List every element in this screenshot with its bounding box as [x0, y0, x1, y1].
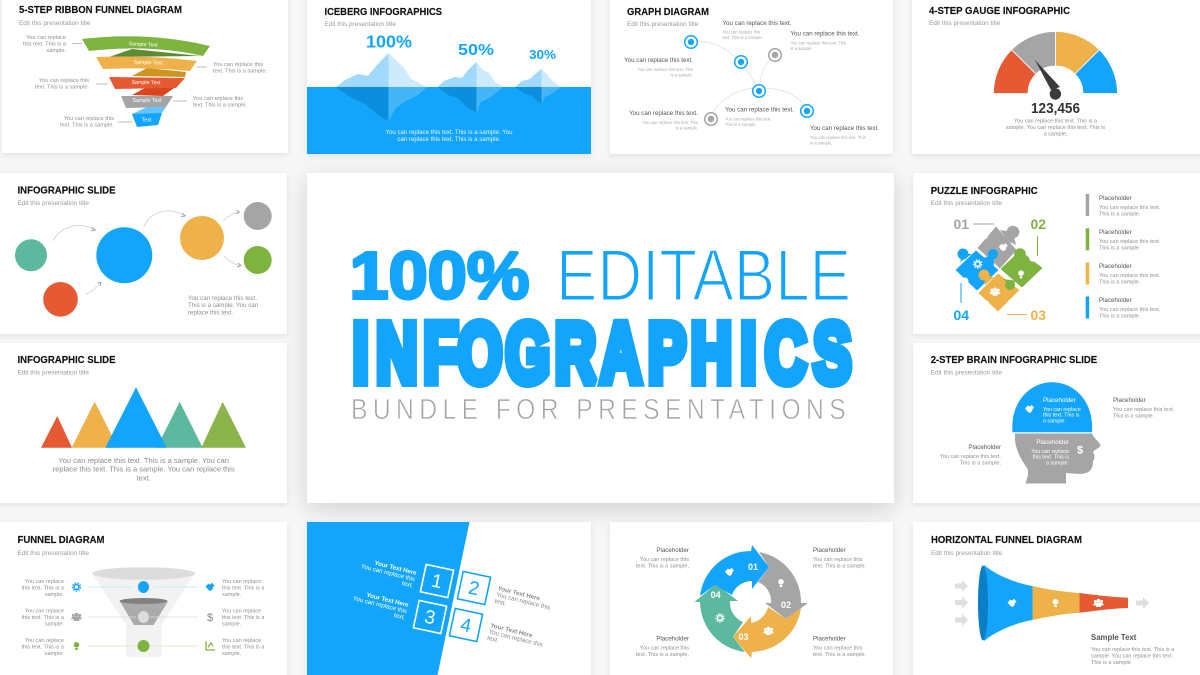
graph links	[691, 42, 807, 119]
subtitle: funnel: Edit this presentation title	[18, 550, 89, 557]
puzzle legend: Placeholder	[1099, 195, 1132, 202]
puzzle pieces	[955, 226, 1043, 312]
subtitle: gauge: Edit this presentation title	[929, 20, 1001, 27]
puzzle legend: Placeholder	[1099, 229, 1132, 236]
numbered squares: 3	[422, 607, 437, 629]
cycle icons	[716, 568, 784, 635]
cycle texts: Placeholder	[656, 636, 689, 642]
panel: infographic slide circles	[0, 173, 287, 334]
callout texts: ribbon funnel: You can replace this	[64, 116, 114, 122]
funnel texts: sample.	[45, 622, 64, 628]
tilted texts: Your Text Here	[497, 585, 541, 603]
water	[307, 87, 591, 154]
panel: funnel diagram	[0, 522, 287, 675]
panel: 2-step brain infographic	[913, 343, 1200, 503]
iceberg 30%: 30%	[529, 47, 556, 62]
numbered squares: 1	[429, 571, 444, 593]
callout texts: ribbon funnel: text. This is a sample.	[193, 102, 247, 108]
graph labels: You can replace this text.	[790, 30, 860, 38]
subtitle: horizontal funnel: Edit this presentation title	[931, 550, 1003, 557]
brain texts: You can replace	[1043, 407, 1081, 413]
subtitle: iceberg: Edit this presentation title	[324, 21, 396, 28]
funnel graphic	[88, 567, 198, 657]
funnel texts: this text. This is a	[22, 615, 65, 621]
puzzle legend: This is a sample.	[1099, 211, 1141, 217]
heading: horizontal funnel: HORIZONTAL FUNNEL DIAGRAM	[931, 534, 1082, 546]
cycle texts: text. This is a sample.	[813, 652, 867, 658]
heading: gauge: 4-STEP GAUGE INFOGRAPHIC	[929, 5, 1070, 17]
blue slanted block	[307, 522, 470, 675]
numbered squares: 4	[458, 615, 474, 637]
panel: horizontal funnel diagram	[913, 522, 1200, 675]
sample text block	[1091, 633, 1175, 666]
funnel texts	[22, 579, 265, 657]
ribbon funnel graphic	[82, 36, 210, 127]
tilted texts: text.	[401, 580, 414, 590]
cycle texts: You can replace this	[813, 557, 862, 563]
head: grey face	[1015, 434, 1101, 484]
funnel texts: You can replace	[222, 609, 261, 615]
graph labels: is a sample.	[790, 46, 813, 51]
tilted texts: Your Text Here	[366, 592, 410, 609]
cycle texts: Placeholder	[813, 547, 846, 554]
cycle texts: You can replace this	[640, 557, 689, 563]
triangles caption: text.	[137, 473, 151, 482]
puzzle icons	[974, 243, 1024, 296]
subtitle: puzzle: Edit this presentation title	[931, 200, 1003, 207]
head: blue brain	[1012, 382, 1092, 432]
gauge chart	[993, 31, 1118, 93]
funnel texts: You can replace	[222, 579, 261, 585]
funnel texts: this text. This is a	[22, 644, 65, 650]
triangles chart	[41, 387, 246, 448]
puzzle numbers: 04	[954, 307, 969, 323]
heading: circles slide: INFOGRAPHIC SLIDE	[18, 184, 116, 196]
graph labels: is a sample.	[676, 126, 698, 130]
headline: EDITABLE: EDITABLE	[556, 236, 851, 316]
iceberg 100%: 100%	[366, 32, 412, 52]
headline: INFOGRAPHICS: INFOGRAPHICS	[353, 307, 851, 401]
callout texts: ribbon funnel: sample.	[46, 48, 66, 54]
cycle numbers: 03	[738, 632, 749, 642]
graph labels: You can replace this text. This	[790, 40, 846, 46]
iceberg caption: can replace this text. This is a sample.	[397, 136, 501, 143]
brain texts: a sample.	[1043, 418, 1066, 424]
puzzle numbers	[954, 216, 1046, 323]
panel: tilted numbered squares	[307, 522, 591, 675]
funnel texts: sample.	[222, 592, 242, 598]
funnel texts: You can replace	[25, 579, 64, 585]
funnel texts: this text. This is a	[222, 615, 265, 621]
funnel texts: this text. This is a	[22, 586, 65, 592]
gauge caption: a sample.	[1044, 132, 1068, 138]
sample text block: Sample Text	[1091, 633, 1137, 642]
funnel texts: sample.	[222, 622, 242, 628]
callout texts: ribbon funnel: this text. This is a	[23, 42, 67, 48]
funnel icons	[71, 583, 215, 650]
arrows in and out	[955, 580, 1149, 626]
graph labels: is a sample.	[810, 140, 832, 146]
cycle numbers	[711, 562, 791, 642]
tilted texts: text.	[494, 598, 507, 607]
iceberg 100%	[336, 32, 427, 121]
panel: 5-step ribbon funnel diagram	[2, 0, 288, 153]
graph labels: You can replace this text.	[810, 125, 879, 132]
graph labels: You can replace this text. This	[637, 67, 693, 72]
heading: graph: GRAPH DIAGRAM	[627, 6, 709, 18]
triangles caption: replace this text. This is a sample. You can replace this	[53, 465, 235, 474]
puzzle legend: This is a sample.	[1099, 313, 1141, 319]
subtitle: triangles slide: Edit this presentation title	[18, 370, 89, 376]
tilted texts: Your Text Here	[490, 622, 534, 640]
funnel texts: You can replace	[25, 609, 64, 615]
gauge caption: sample. You can replace this text. This is	[1006, 125, 1105, 131]
puzzle numbers: 03	[1030, 307, 1046, 323]
cycle texts: Placeholder	[813, 636, 846, 642]
cycle numbers: 01	[748, 562, 758, 572]
gauge caption: You can replace this text. This is a	[1014, 118, 1097, 124]
brain texts: You can replace this text.	[1113, 407, 1174, 413]
brain texts: This is a sample.	[1113, 413, 1155, 419]
brain texts: You can replace this text.	[940, 454, 1001, 460]
funnel texts: sample.	[45, 651, 64, 657]
callout texts: ribbon funnel: text. This is a sample.	[213, 68, 267, 74]
brain texts: This is a sample.	[960, 460, 1001, 466]
sample text block: sample. You can replace this text.	[1091, 654, 1173, 660]
cycle texts	[636, 547, 867, 658]
callout texts: ribbon funnel: You can replace this	[213, 62, 263, 68]
tilted texts: Your Text Here	[374, 560, 418, 577]
graph labels: This is a sample.	[725, 122, 756, 127]
panel: iceberg infographics	[307, 0, 591, 154]
panel: 4-step gauge infographic	[912, 0, 1200, 154]
circles caption: This is a sample. You can	[188, 302, 259, 309]
graph labels: You can replace this text.	[722, 20, 792, 27]
ribbon funnel graphic: Sample Text	[132, 98, 162, 104]
brain texts	[940, 397, 1175, 466]
cycle texts: You can replace this	[813, 646, 862, 652]
funnel texts: this text. This is a	[222, 644, 265, 650]
cycle texts: text. This is a sample.	[636, 652, 689, 658]
headline: bundle for presentations: BUNDLE FOR PRESENTATIONS	[351, 393, 846, 425]
heading: triangles slide: INFOGRAPHIC SLIDE	[18, 354, 116, 366]
panel: puzzle infographic	[913, 173, 1200, 334]
cycle texts: You can replace this	[640, 646, 689, 652]
iceberg 30%	[515, 47, 561, 104]
callout texts: ribbon funnel: You can replace	[26, 35, 66, 41]
callout texts: ribbon funnel	[23, 35, 267, 128]
graph labels: You can replace this text.	[725, 116, 772, 122]
horizontal funnel icons	[1008, 599, 1104, 607]
funnel texts: sample.	[45, 592, 64, 598]
cycle numbers: 04	[711, 590, 721, 600]
headline: 100%: 100%	[350, 238, 530, 314]
ribbon funnel graphic: Text	[142, 118, 152, 124]
panel: graph diagram	[610, 0, 893, 154]
ribbon funnel graphic: Sample Text	[128, 41, 158, 49]
panel: centre title card	[307, 173, 894, 503]
subtitle: circles slide: Edit this presentation title	[18, 200, 89, 207]
circles caption: You can replace this text.	[188, 295, 257, 302]
graph labels: You can replace this text.	[629, 110, 698, 117]
tilted texts: You can replace this	[360, 563, 416, 583]
subtitle: brain: Edit this presentation title	[931, 370, 1003, 376]
puzzle legend: This is a sample.	[1099, 279, 1141, 285]
heading: ribbon funnel: 5-STEP RIBBON FUNNEL DIAGRAM	[19, 4, 182, 16]
brain texts: $	[1077, 444, 1083, 456]
subtitle: ribbon funnel: Edit this presentation title	[19, 20, 91, 27]
graph labels: You can replace this	[722, 30, 760, 34]
ribbon funnel graphic: Sample Text	[133, 59, 163, 67]
horizontal funnel graphic	[978, 565, 1128, 641]
puzzle legend: You can replace this text.	[1099, 273, 1160, 279]
puzzle legend: Placeholder	[1099, 263, 1132, 270]
callout texts: ribbon funnel: You can replace this	[193, 96, 243, 102]
puzzle legend: Placeholder	[1099, 297, 1132, 304]
triangles caption: You can replace this text. This is a sample. You can	[58, 456, 229, 465]
tilted texts: You can replace this	[495, 591, 551, 612]
puzzle legend	[1086, 194, 1161, 319]
heading: brain: 2-STEP BRAIN INFOGRAPHIC SLIDE	[931, 354, 1097, 366]
puzzle legend: You can replace this text.	[1099, 205, 1160, 211]
tilted texts: text.	[486, 635, 500, 644]
puzzle numbers: 02	[1030, 216, 1046, 232]
brain texts: this text. This is	[1043, 413, 1080, 419]
puzzle numbers: 01	[954, 216, 969, 232]
funnel texts: sample.	[222, 651, 242, 657]
graph labels: You can replace this text. This	[810, 135, 866, 140]
numbered squares	[413, 564, 491, 642]
brain texts: Placeholder	[1113, 397, 1146, 404]
heading: iceberg: ICEBERG INFOGRAPHICS	[324, 6, 442, 18]
tilted texts	[351, 557, 553, 655]
panel: circular arrows	[610, 522, 893, 675]
brain texts: Placeholder	[968, 444, 1001, 451]
panel: infographic slide triangles	[0, 343, 287, 503]
gauge value: 123,456	[1031, 100, 1080, 117]
funnel texts: this text. This is a	[222, 586, 265, 592]
brain texts: this text. This is	[1033, 455, 1069, 461]
graph labels: text. This is a sample.	[722, 35, 763, 40]
funnel icons: $	[207, 612, 213, 624]
sample text block: This is a sample.	[1091, 660, 1133, 666]
puzzle legend: You can replace this text.	[1099, 239, 1160, 245]
subtitle: graph: Edit this presentation title	[627, 21, 699, 28]
callout texts: ribbon funnel: text. This is a sample.	[60, 122, 114, 128]
numbered squares: 2	[466, 578, 481, 600]
circle nodes	[15, 202, 272, 317]
callout texts: ribbon funnel: You can replace this	[39, 78, 89, 84]
iceberg 50%: 50%	[458, 42, 494, 59]
brain texts: Placeholder	[1043, 397, 1076, 404]
cycle numbers: 02	[781, 600, 791, 610]
graph labels: is a sample.	[671, 72, 693, 78]
funnel texts: You can replace	[25, 638, 64, 644]
graph labels: You can replace this text.	[725, 106, 794, 114]
brain texts: You can replace	[1031, 449, 1069, 455]
brain texts: a sample.	[1046, 460, 1069, 466]
graph labels: You can replace this text. This	[642, 120, 698, 125]
cycle texts: Placeholder	[656, 547, 689, 554]
iceberg 50%	[437, 42, 503, 113]
tilted texts: text.	[393, 612, 406, 622]
circles caption: replace this text.	[188, 309, 233, 316]
tilted texts: You can replace this	[488, 628, 543, 649]
heading: funnel: FUNNEL DIAGRAM	[18, 534, 105, 546]
graph nodes	[685, 36, 813, 125]
cycle texts: text. This is a sample.	[636, 563, 689, 569]
tilted texts: You can replace this	[352, 595, 408, 615]
funnel texts: You can replace	[222, 638, 261, 644]
heading: puzzle: PUZZLE INFOGRAPHIC	[931, 185, 1038, 197]
brain texts: Placeholder	[1036, 439, 1069, 446]
callout texts: ribbon funnel: text. This is a sample.	[35, 84, 89, 90]
cycle texts: text. This is a sample.	[813, 563, 867, 569]
puzzle legend: You can replace this text.	[1099, 307, 1160, 313]
cycle arrows	[694, 545, 808, 658]
flow arrows	[53, 210, 241, 294]
puzzle legend: This is a sample.	[1099, 245, 1141, 251]
graph labels: You can replace this text.	[624, 57, 693, 64]
iceberg caption: You can replace this text. This is a sample. You	[385, 129, 513, 136]
graph labels	[624, 20, 879, 146]
ribbon funnel graphic: Sample Text	[131, 80, 161, 86]
gauge needle	[1035, 60, 1061, 100]
sample text block: You can replace this text. This is a	[1091, 647, 1174, 653]
